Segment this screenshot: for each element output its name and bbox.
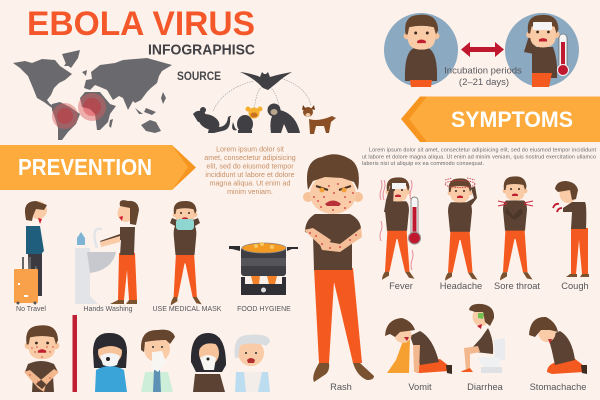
stomachache figure — [529, 317, 587, 374]
bottom row: infected man with rash — [24, 325, 59, 392]
prevention description text: minim veniam. — [227, 188, 273, 196]
sore throat figure — [498, 176, 533, 281]
symptom labels row 2: Rash — [330, 382, 352, 392]
symptoms description text: laboris nisi ut aliquip ex ea commodo consequat. — [362, 161, 484, 167]
bottom row: woman with respirator mask — [93, 333, 127, 392]
symptom labels row 1: Fever — [389, 281, 413, 291]
headache figure — [445, 178, 478, 281]
incubation diagram — [384, 13, 579, 88]
prevention description text: Lorem ipsum dolor sit — [216, 146, 284, 154]
prevention labels: Hands Washing — [83, 306, 133, 313]
prevention banner: PREVENTION — [18, 154, 152, 180]
prevention labels — [16, 306, 291, 313]
symptom labels row 2 — [330, 382, 586, 392]
prevention labels: USE MEDICAL MASK — [153, 306, 222, 313]
bottom row: elderly man coughing — [235, 335, 270, 392]
symptom labels row 2: Stomachache — [530, 382, 586, 392]
prevention labels: FOOD HYGIENE — [237, 306, 291, 313]
prevention description text: incididunt ut labore et dolore — [205, 171, 295, 179]
symptom labels row 1: Cough — [561, 281, 589, 291]
symptoms description text: Lorem ipsum dolor sit amet, consectetur adipisicing elit, sed do eiusmod tempor incididunt — [369, 148, 596, 154]
source animals diagram — [193, 72, 336, 134]
prevention description text: amet, consectetur adipisicing — [204, 154, 296, 162]
bottom row: woman covering face — [191, 333, 226, 392]
hand washing figure and sink — [75, 200, 139, 304]
medical mask figure — [170, 201, 202, 305]
symptoms banner — [401, 96, 600, 142]
cough figure — [553, 181, 589, 277]
prevention labels: No Travel — [16, 306, 46, 313]
bottom row: man covering nose with tissue — [141, 330, 175, 392]
title: EBOLA VIRUS — [27, 5, 255, 43]
rash large figure — [303, 154, 374, 382]
prevention description text: magna aliqua. Ut enim ad — [210, 180, 290, 188]
incubation diagram: Incubation periods — [444, 66, 522, 76]
prevention banner — [0, 145, 196, 190]
world map with outbreak areas — [13, 50, 172, 140]
symptom labels row 1: Headache — [440, 281, 482, 291]
subtitle: INFOGRAPHISC — [148, 42, 255, 58]
divider bar — [72, 315, 77, 392]
vomit figure — [385, 318, 452, 374]
symptom labels row 2: Diarrhea — [467, 382, 504, 392]
symptom labels row 2: Vomit — [408, 382, 432, 392]
incubation diagram: (2–21 days) — [459, 77, 509, 88]
cooking pot — [229, 242, 298, 295]
source label: SOURCE — [177, 71, 221, 83]
symptom labels row 1: Sore throat — [494, 281, 540, 291]
diarrhea figure — [461, 304, 505, 373]
fever figure — [380, 177, 420, 280]
symptoms description text: ut labore et dolore magna aliqua. Ut enim ad minim veniam, quis nostrud exercitation ullamco — [362, 154, 596, 160]
no travel figure — [14, 201, 47, 304]
prevention description text: elit, sed do eiusmod tempor — [206, 162, 294, 170]
symptoms banner: SYMPTOMS — [451, 107, 573, 132]
symptom labels row 1 — [389, 281, 589, 291]
